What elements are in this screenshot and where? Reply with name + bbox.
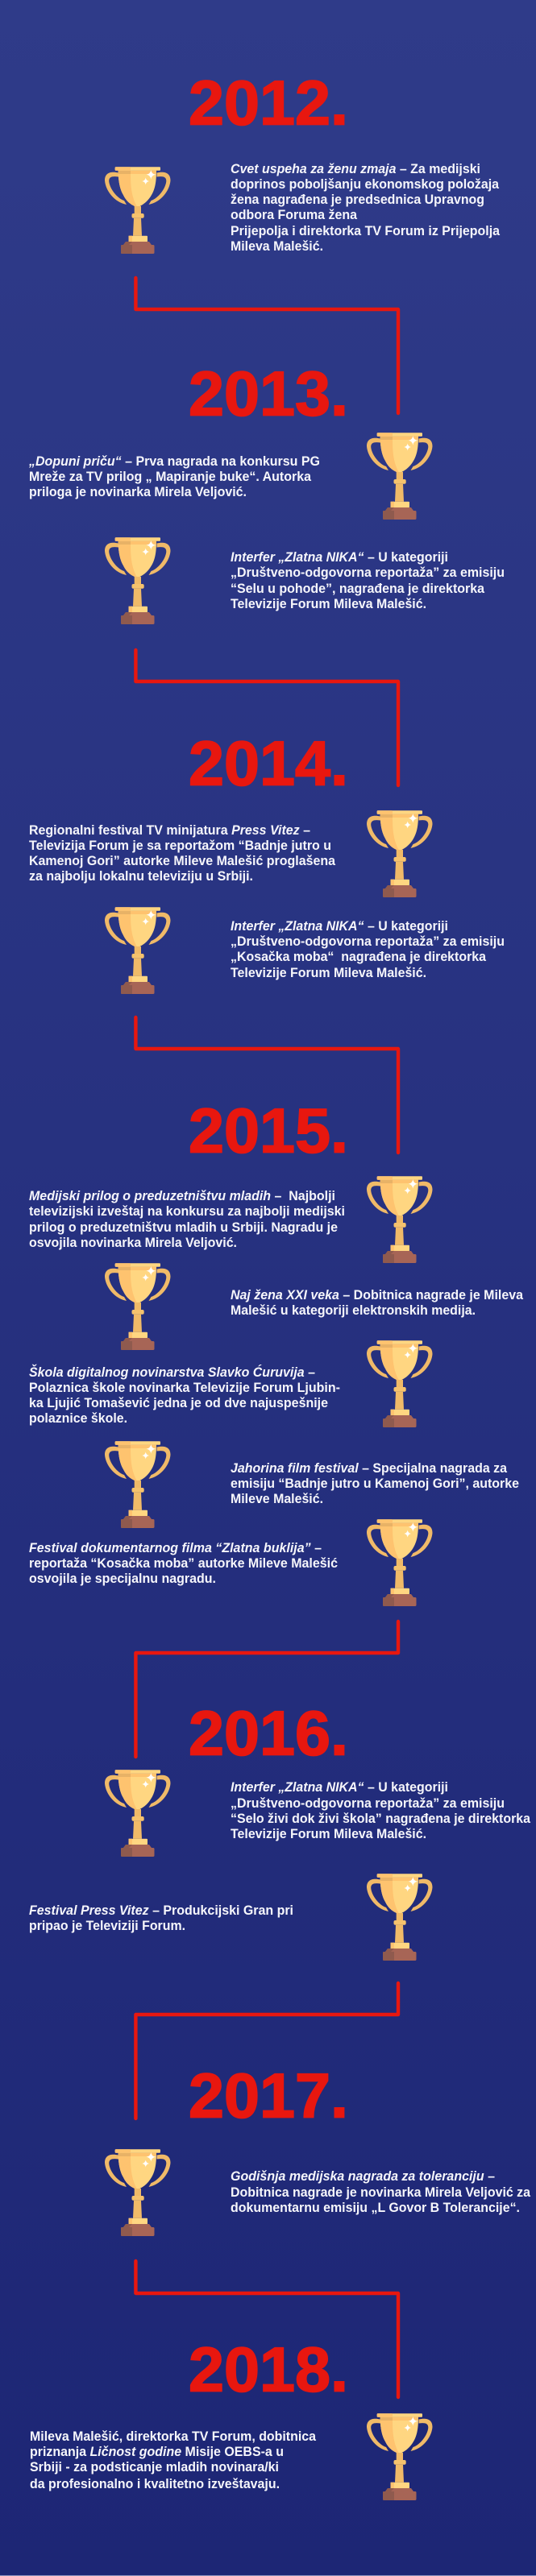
- text block: Festival Press Vitez: pripao je Televiziji Forum.: [29, 1919, 185, 1933]
- text block: Cvet uspeha: doprinos poboljšanju ekonomskog položaja: [231, 177, 500, 192]
- text block: Dopuni priču: Mreže za TV prilog „ Mapiranje buke“. Autorka: [29, 470, 312, 484]
- text block: Interfer Selu u pohode: [231, 550, 505, 611]
- connector 2012 to 2013: [135, 278, 398, 413]
- text block: Zlatna buklija: reportaža “Kosačka moba” autorke Mileve Malešić: [29, 1556, 338, 1571]
- year heading: 2012: 2012.: [189, 68, 348, 139]
- text block: Jahorina film festival: [231, 1461, 519, 1506]
- text block: Naj žena: Malešić u kategoriji elektronskih medija.: [231, 1303, 476, 1318]
- text block: Dopuni priču: „Dopuni priču“ – Prva nagrada na konkursu PG: [28, 454, 320, 469]
- text block: Interfer Selu u pohode: Interfer „Zlatna NIKA“ – U kategoriji: [231, 550, 448, 565]
- text block: Mileva Malešić Ličnost godine: Mileva Malešić, direktorka TV Forum, dobitnica: [30, 2429, 317, 2444]
- text block: Press Vitez: za najbolju lokalnu televiziju u Srbiji.: [29, 869, 253, 884]
- connector 2016 to 2017: [135, 1983, 398, 2118]
- icon: trophy 2017: [105, 2149, 171, 2236]
- text block: Press Vitez: [29, 823, 336, 884]
- text block: Interfer Selu u pohode: „Društveno-odgovorna reportaža” za emisiju: [231, 565, 505, 580]
- text block: Press Vitez: Televizija Forum je sa reportažom “Badnje jutro u: [29, 839, 331, 853]
- text block: Cvet uspeha: žena nagrađena je predsednica Upravnog: [231, 193, 484, 207]
- connector 2017 to 2018: [135, 2261, 398, 2397]
- text block: Interfer Selu u pohode: Televizije Forum Mileva Malešić.: [231, 597, 426, 611]
- icon: trophy 2015 first: [367, 1176, 432, 1263]
- text block: Škola digitalnog novinarstva: ka Ljujić Tomašević jedna je od dve najuspešnije: [29, 1396, 328, 1410]
- text block: Zlatna buklija: Festival dokumentarnog filma “Zlatna buklija” –: [29, 1541, 322, 1555]
- icon: trophy 2016 right: [367, 1874, 432, 1961]
- text block: Mileva Malešić Ličnost godine: da profesionalno i kvalitetno izveštavaju.: [30, 2477, 280, 2491]
- text block: Naj žena: [231, 1288, 524, 1318]
- text block: Cvet uspeha: odbora Foruma žena: [231, 208, 358, 222]
- icon: trophy 2015 second: [105, 1263, 171, 1350]
- icon: trophy 2014 right: [367, 810, 432, 897]
- text block: Festival Press Vitez: [29, 1903, 293, 1933]
- icon: trophy 2014 left: [105, 907, 171, 994]
- year heading: 2014: 2014.: [189, 728, 348, 799]
- connector 2014 to 2015: [135, 1017, 398, 1153]
- text block: Interfer Selo živi: Interfer „Zlatna NIKA“ – U kategoriji: [231, 1780, 448, 1795]
- connector 2015 to 2016: [135, 1621, 398, 1757]
- text block: Godišnja medijska nagrada: Godišnja medijska nagrada za toleranciju –: [231, 2169, 495, 2184]
- text block: Press Vitez: Kamenoj Gori” autorke Mileve Malešić proglašena: [29, 854, 336, 868]
- text block: Interfer Kosačka moba: Televizije Forum Mileva Malešić.: [231, 966, 426, 980]
- text block: Zlatna buklija: [29, 1541, 338, 1586]
- text block: Godišnja medijska nagrada: Dobitnica nagrade je novinarka Mirela Veljović za: [231, 2185, 531, 2200]
- text block: Cvet uspeha: Mileva Malešić.: [231, 239, 323, 254]
- text block: Škola digitalnog novinarstva: Škola digitalnog novinarstva Slavko Ćuruvija –: [29, 1365, 315, 1380]
- text block: Interfer Selo živi: „Društveno-odgovorna reportaža” za emisiju: [231, 1796, 505, 1811]
- text block: Jahorina film festival: emisiju “Badnje jutro u Kamenoj Gori”, autorke: [231, 1476, 519, 1491]
- icon: trophy 2018: [367, 2413, 432, 2500]
- text block: Medijski prilog: televizijski izveštaj na konkursu za najbolji medijski: [29, 1204, 345, 1219]
- year heading: 2015: 2015.: [189, 1095, 348, 1166]
- icon: trophy 2015 fifth: [367, 1519, 432, 1606]
- text block: Jahorina film festival: Jahorina film festival – Specijalna nagrada za: [231, 1461, 508, 1476]
- text block: Škola digitalnog novinarstva: Polaznica škole novinarka Televizije Forum Ljubin-: [29, 1381, 340, 1395]
- icon: trophy 2015 third: [367, 1340, 432, 1427]
- year heading: 2018: 2018.: [189, 2334, 348, 2405]
- icon: trophy 2012: [105, 167, 171, 254]
- year heading: 2017: 2017.: [189, 2060, 348, 2131]
- text block: Cvet uspeha: Prijepolja i direktorka TV Forum iz Prijepolja: [231, 224, 501, 238]
- text block: Interfer Selo živi: [231, 1780, 531, 1841]
- icon: trophy 2015 fourth: [105, 1441, 171, 1528]
- text block: Cvet uspeha: [231, 162, 501, 254]
- text block: Godišnja medijska nagrada: [231, 2169, 531, 2215]
- text block: Press Vitez: Regionalni festival TV minijatura Press Vitez –: [29, 823, 310, 838]
- text block: Interfer Selo živi: Televizije Forum Mileva Malešić.: [231, 1827, 426, 1841]
- text block: Mileva Malešić Ličnost godine: Srbiji - za podsticanje mladih novinara/ki: [30, 2460, 279, 2475]
- text block: Godišnja medijska nagrada: dokumentarnu emisiju „L Govor B Tolerancije“.: [231, 2201, 520, 2215]
- text block: Interfer Selo živi: “Selo živi dok živi škola” nagrađena je direktorka: [231, 1812, 531, 1826]
- text block: Interfer Kosačka moba: Interfer „Zlatna NIKA“ – U kategoriji: [231, 919, 448, 934]
- text block: Interfer Kosačka moba: „Kosačka moba“ nagrađena je direktorka: [231, 950, 487, 964]
- text block: Medijski prilog: osvojila novinarka Mirela Veljović.: [29, 1236, 237, 1250]
- year heading: 2016: 2016.: [189, 1698, 348, 1769]
- icon: trophy 2013 left: [105, 537, 171, 624]
- text block: Jahorina film festival: Mileve Malešić.: [231, 1492, 323, 1506]
- icon: trophy 2016 left: [105, 1770, 171, 1857]
- text block: Interfer Kosačka moba: „Društveno-odgovorna reportaža” za emisiju: [231, 934, 505, 949]
- text block: Medijski prilog: Medijski prilog o preduzetništvu mladih – Najbolji: [29, 1189, 335, 1203]
- text block: Medijski prilog: [29, 1189, 345, 1250]
- year heading: 2013: 2013.: [189, 358, 348, 429]
- text block: Škola digitalnog novinarstva: polaznice škole.: [29, 1411, 127, 1426]
- text block: Naj žena: Naj žena XXI veka – Dobitnica nagrade je Mileva: [231, 1288, 524, 1302]
- text block: Škola digitalnog novinarstva: [29, 1365, 340, 1426]
- icon: trophy 2013 right: [367, 433, 432, 520]
- text block: Mileva Malešić Ličnost godine: priznanja Ličnost godine Misije OEBS-a u: [30, 2445, 284, 2459]
- text block: Festival Press Vitez: Festival Press Vitez – Produkcijski Gran pri: [29, 1903, 293, 1918]
- text block: Medijski prilog: prilog o preduzetništvu mladih u Srbiji. Nagradu je: [29, 1220, 338, 1235]
- text block: Mileva Malešić Ličnost godine: [30, 2429, 317, 2491]
- text block: Dopuni priču: priloga je novinarka Mirela Veljović.: [29, 485, 247, 499]
- text block: Interfer Selu u pohode: “Selu u pohode”, nagrađena je direktorka: [231, 582, 485, 596]
- text block: Interfer Kosačka moba: [231, 919, 505, 980]
- text block: Dopuni priču: [28, 454, 320, 499]
- text block: Zlatna buklija: osvojila je specijalnu nagradu.: [29, 1572, 216, 1586]
- connector 2013 to 2014: [135, 650, 398, 785]
- text block: Cvet uspeha: Cvet uspeha za ženu zmaja – Za medijski: [231, 162, 480, 176]
